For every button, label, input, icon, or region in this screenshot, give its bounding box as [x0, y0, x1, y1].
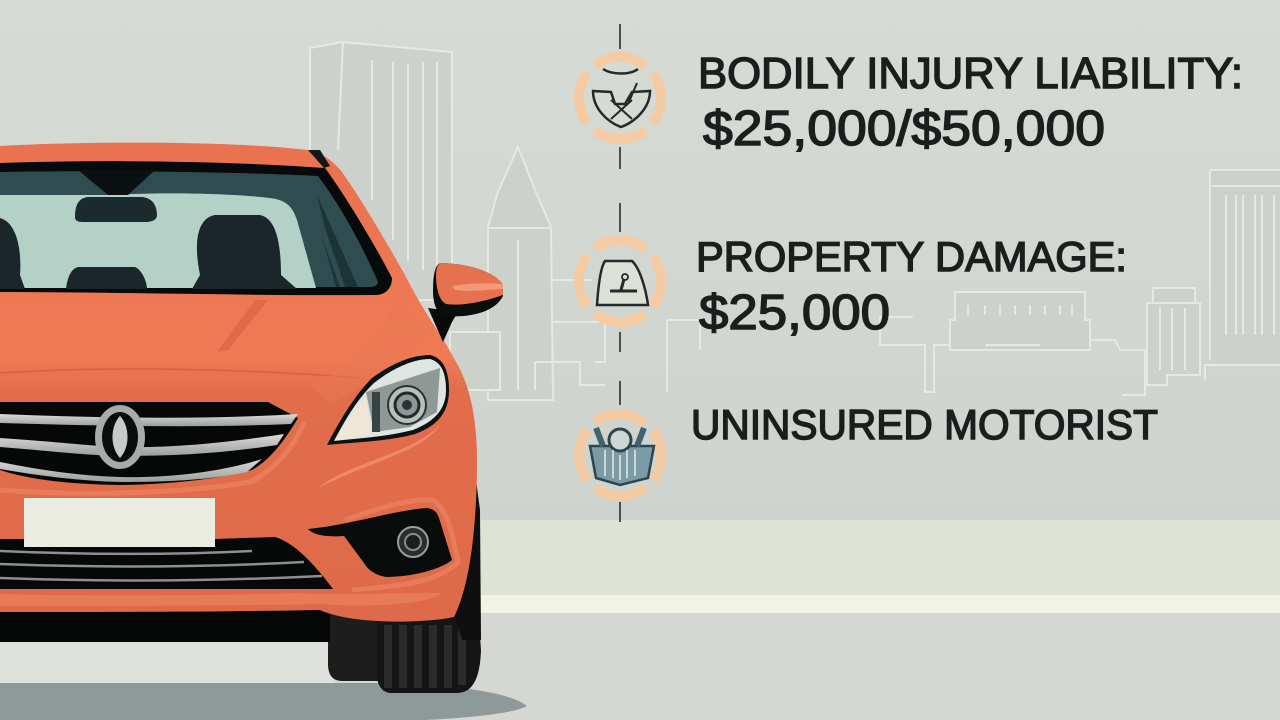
road strip under the car — [0, 640, 335, 684]
text: property damage — [696, 233, 1127, 340]
windshield streaks — [317, 195, 358, 287]
car shadow — [0, 683, 527, 720]
road surface — [0, 613, 1280, 720]
fog lamp surround highlight — [345, 500, 458, 590]
text: property damage: PROPERTY DAMAGE: — [696, 233, 1127, 280]
lower grille — [0, 537, 333, 589]
car body — [0, 143, 477, 622]
text: bodily injury liability: BODILY INJURY LIABILITY: — [698, 49, 1243, 98]
bumper lip — [0, 593, 442, 606]
side mirror — [428, 263, 503, 342]
headlight — [327, 355, 449, 445]
centre headrest — [66, 267, 147, 289]
hood crease — [0, 369, 360, 378]
bumper crease highlight — [318, 425, 440, 488]
windshield glare glass — [0, 193, 316, 288]
text: property damage amount: $25,000 — [699, 286, 890, 340]
rear-view mirror — [75, 170, 157, 222]
background pavement band — [0, 520, 1280, 596]
windshield frame — [0, 161, 392, 295]
text: uninsured motorist: UNINSURED MOTORIST — [691, 401, 1158, 448]
text: bodily injury amount: $25,000/$50,000 — [703, 102, 1105, 156]
right seat — [192, 215, 297, 289]
icon: uninsured motorist — [579, 414, 661, 496]
windshield dark tint — [0, 171, 378, 287]
left seat — [0, 218, 25, 289]
upper grille — [0, 402, 298, 485]
windshield wiper — [308, 150, 330, 168]
fog lamp housing — [308, 508, 452, 577]
grille surround highlight — [0, 422, 304, 493]
red car — [0, 143, 503, 693]
icon: bodily injury shield — [579, 57, 661, 139]
background sky — [0, 0, 1280, 522]
front licence plate — [24, 498, 215, 547]
road edge line — [0, 595, 1280, 613]
text: bodily injury liability — [698, 49, 1243, 156]
wheel arch edge — [450, 480, 481, 640]
front tyre — [377, 610, 481, 693]
timeline connector lines — [619, 24, 621, 522]
icon: property damage — [579, 240, 661, 322]
hood fold — [217, 300, 268, 352]
rear tyre — [328, 610, 385, 681]
city skyline — [310, 42, 1280, 400]
hood highlight — [310, 300, 430, 405]
under-bumper shadow — [0, 600, 330, 642]
grille emblem — [95, 405, 145, 469]
